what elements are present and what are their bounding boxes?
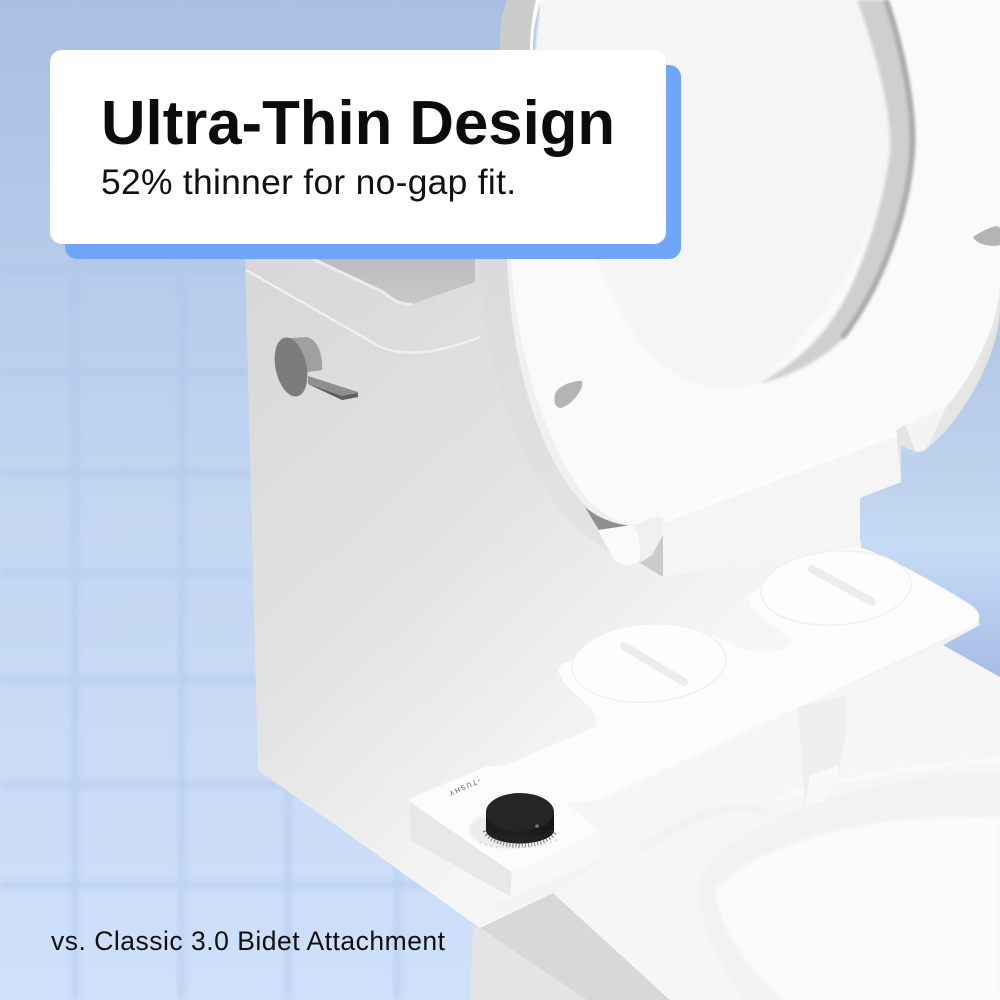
lid rim [500,0,540,50]
bowl deck [553,645,1000,1000]
seat rim line [507,259,700,540]
bidet attachment [410,546,980,912]
knob shadow [469,812,541,848]
hinge highlight [663,430,897,523]
module front left face [410,802,512,898]
subheading: 52% thinner for no-gap fit. [101,162,516,202]
seat slit shadow [585,507,632,532]
oval shadow crescent [757,0,915,384]
headline card with blue offset [50,50,666,244]
nozzle stem [798,695,846,807]
tile grid [0,0,500,1000]
seat underside shell [480,259,1000,577]
flush handle [270,334,358,400]
seat face [511,0,1000,525]
bowl well [698,772,1000,1000]
bowl inner rim highlight [773,760,1000,800]
knob side [486,812,554,844]
right mounting disc [759,546,913,630]
bumper left [554,381,582,408]
right seat edge [925,283,1000,450]
crescent outer edge [842,0,912,338]
dial marks [480,838,560,848]
knob ridges [487,830,553,843]
plate top surface [410,548,979,872]
control knob [469,793,560,848]
blue gap right of hinge [860,310,1000,677]
rim side band [480,893,670,1000]
hinge block [663,430,901,577]
lid highlight [313,259,412,304]
toilet seat and lid [480,0,1000,677]
comparison footnote: vs. Classic 3.0 Bidet Attachment [51,926,446,956]
knob top [486,793,554,831]
pedestal [470,925,620,1000]
tank and rear body [245,259,943,1000]
plate thickness [566,620,980,805]
toilet body and tank [245,259,943,1000]
lid underside oval [533,0,891,388]
bumper right [973,226,1000,246]
tank lid recess [313,259,475,304]
hinge side shade [640,535,663,577]
knob indicator [535,824,539,828]
left mounting disc [569,619,729,707]
right hinge lump [896,407,946,452]
plate under lip [490,860,600,912]
heading: Ultra-Thin Design [101,89,615,158]
left hinge lump [598,525,640,565]
nozzle tip [805,765,838,807]
tank lid groove [246,270,480,353]
brand label: ◦TUSHY [447,776,481,797]
bowl crease shadow [640,807,770,850]
hinge barrel [634,517,663,562]
module front right face [510,832,600,898]
